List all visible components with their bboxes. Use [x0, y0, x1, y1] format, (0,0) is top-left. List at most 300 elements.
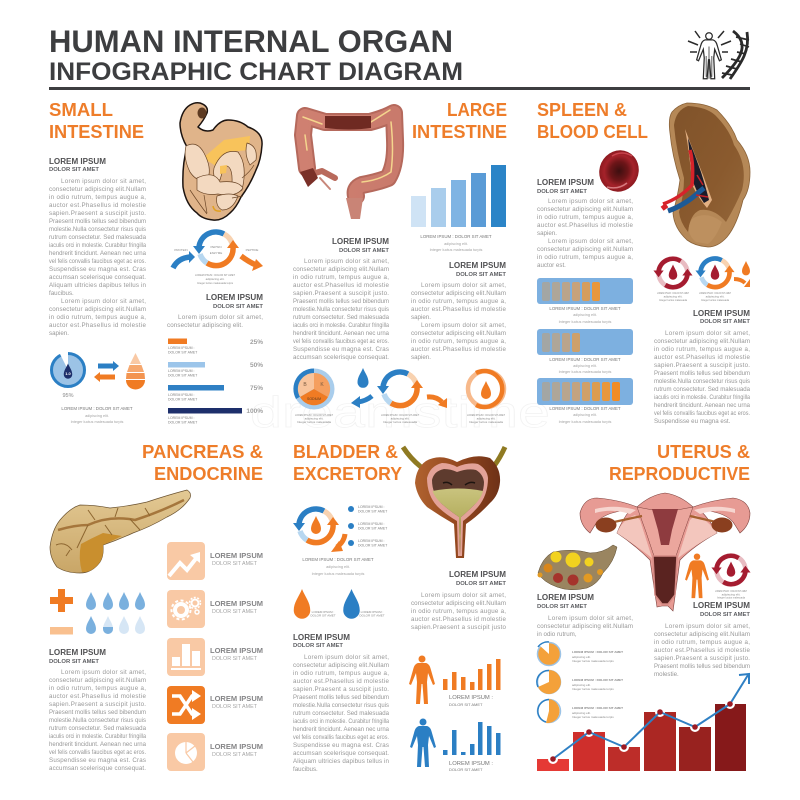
bar chart: percentages: LOREM IPSUM :	[168, 369, 194, 373]
text block: spleen left: Lorem ipsum dolor sit amet,	[548, 238, 633, 245]
title: HUMAN INTERNAL ORGAN	[49, 23, 453, 59]
text block: uterus left: Lorem ipsum dolor sit amet,	[548, 615, 633, 622]
cycle chart: protein enzyme peptide	[173, 232, 263, 285]
bar chart: orange	[443, 659, 500, 707]
small captions: Integer luctus malesuada	[297, 420, 331, 424]
text block: small intestine: LOREM IPSUM	[49, 157, 106, 166]
caption: adipiscing elit.	[85, 414, 109, 418]
small captions: adipiscing elit.	[305, 416, 324, 420]
text block: large intestine right: in odio rutrum, tempus augue a,	[411, 338, 506, 345]
text block: bladder left: Suspendisse eu magna est. Cras	[293, 742, 389, 749]
text block: bladder left: LOREM IPSUM	[293, 633, 350, 642]
icon tile: gears	[167, 590, 263, 628]
text block: spleen left: auctor est.	[537, 262, 566, 269]
legend: bullets: LOREM IPSUM :	[358, 539, 384, 543]
text block: pancreas: rutrum consectetur. Sed malesuada	[49, 725, 147, 732]
text block: large intestine left: Lorem ipsum dolor sit amet,	[304, 258, 389, 265]
text block: bladder left: iaculis orci in molestie. Curabitur fringilla	[293, 718, 389, 725]
text block: small intestine right: consectetur adipiscing elit.	[167, 322, 243, 329]
caption: LOREM IPSUM : DOLOR SIT AMET	[549, 357, 621, 362]
text block: bladder left: DOLOR SIT AMET	[293, 643, 344, 649]
text block: uterus right: DOLOR SIT AMET	[700, 612, 751, 618]
text block: bladder left: molestie.Nulla consectetur risus quis	[293, 702, 389, 709]
caption: LOREM IPSUM : DOLOR SIT AMET	[302, 557, 374, 562]
text block: small intestine: rutrum consectetur. Sed malesuada	[49, 234, 147, 241]
icon tile: pie: DOLOR SIT AMET	[212, 752, 257, 758]
heading: small intestine: SMALL	[49, 99, 113, 120]
icon: blue human	[410, 718, 436, 767]
text block: large intestine right: auctor est.Phasellus id molestie	[411, 346, 507, 353]
text block: spleen left	[537, 178, 634, 269]
heading: spleen: BLOOD CELL	[537, 121, 648, 142]
legend: bullets: DOLOR SIT AMET	[358, 510, 388, 514]
bar chart: percentages: LOREM IPSUM :	[168, 416, 194, 420]
bar chart: percentages: LOREM IPSUM :	[168, 393, 194, 397]
bar chart: percentages: LOREM IPSUM :	[168, 346, 194, 350]
caption	[61, 406, 133, 424]
pie gauge 2	[537, 670, 623, 694]
caption: Integer luctus malesuada turpis	[559, 320, 611, 324]
progress bar 2	[537, 329, 633, 355]
small captions: LOREM IPSUM : DOLOR SIT AMET	[381, 413, 419, 417]
cycle chart: protein enzyme peptide: PEPSIN	[210, 245, 222, 249]
cycle chart: blue and orange	[695, 258, 735, 287]
pie gauge: 95%	[52, 350, 84, 399]
text block: bladder left: Praesent mollis tellus sed bibendum	[293, 694, 389, 701]
icon: red blood cell	[592, 144, 646, 198]
heading: uterus: REPRODUCTIVE	[609, 463, 750, 484]
big drops: LOREM IPSUM :	[312, 610, 335, 614]
text block: small intestine: Lorem ipsum dolor sit amet,	[61, 178, 146, 185]
pie chart: three segments: K	[320, 382, 324, 388]
text block: bladder right	[411, 570, 507, 631]
text block: small intestine: in odio rutrum, tempus augue a,	[49, 194, 146, 201]
text block: pancreas: Suspendisse eu magna est. Cras	[49, 757, 146, 764]
big drops: LOREM IPSUM :	[361, 610, 384, 614]
cycle chart: bladder	[293, 509, 345, 552]
text block: large intestine left: accumsan scelerisque consequat.	[293, 354, 389, 361]
illustration: spleen	[663, 103, 750, 247]
bar chart: percentages	[168, 338, 263, 424]
text block: large intestine right: Lorem ipsum dolor sit amet,	[421, 322, 506, 329]
big drops	[294, 589, 385, 619]
text block: bladder right: auctor est.Phasellus id molestie	[411, 616, 507, 623]
text block: small intestine: faucibus.	[49, 290, 74, 297]
watermark: dreamstime	[250, 388, 550, 437]
ring gauge with drop	[468, 371, 504, 407]
text block: spleen right	[654, 309, 751, 425]
icon tile: shuffle: LOREM IPSUM	[210, 694, 263, 703]
small captions: adipiscing elit.	[477, 416, 496, 420]
cycle chart: protein enzyme peptide: PROTEIN	[174, 248, 188, 252]
text block: large intestine left: LOREM IPSUM	[332, 237, 389, 246]
text block: uterus right: auctor est.Phasellus id molestie	[654, 647, 751, 654]
panel: pancreas and endocrine	[49, 441, 263, 772]
text block: large intestine left: iaculis orci in molestie. Curabitur fringilla	[293, 322, 389, 329]
text block: large intestine left	[293, 237, 390, 361]
pie chart: three segments	[293, 368, 334, 410]
text block: small intestine: in odio rutrum, tempus augue a,	[49, 314, 146, 321]
small caption	[715, 589, 747, 600]
heading: spleen	[537, 99, 648, 142]
text block: pancreas: LOREM IPSUM	[49, 648, 106, 657]
text block: spleen left: LOREM IPSUM	[537, 178, 594, 187]
heading: small intestine	[49, 99, 144, 142]
big drops: DOLOR SIT AMET	[359, 614, 385, 618]
text block: spleen right: DOLOR SIT AMET	[700, 319, 751, 325]
text block: bladder right: sapien.Praesent a suscipit justo	[411, 624, 507, 631]
text block: pancreas: Lorem ipsum dolor sit amet,	[61, 669, 146, 676]
bar chart: percentages: 25%	[250, 339, 263, 346]
text block: bladder left: Lorem ipsum dolor sit amet,	[304, 654, 389, 661]
text block: uterus right: Praesent mollis tellus sed bibendum	[654, 663, 750, 670]
text block: bladder left: in odio rutrum, tempus augue a,	[293, 670, 389, 677]
small caption: Integer luctus malesuada	[717, 596, 745, 600]
text block: large intestine left: auctor est.Phasellus id molestie	[293, 282, 390, 289]
small captions: LOREM IPSUM : DOLOR SIT AMET	[657, 291, 689, 295]
panel: small intestine	[49, 99, 264, 424]
panel: large intestine	[293, 99, 507, 424]
small captions: LOREM IPSUM : DOLOR SIT AMET	[699, 291, 731, 295]
pie gauge 1	[538, 642, 623, 666]
text block: spleen left: auctor est.Phasellus id molestie	[537, 222, 634, 229]
text block: spleen right: rutrum consectetur. Sed malesuada	[654, 386, 751, 393]
text block: pancreas: vel felis convallis faucibus eget ac eros.	[49, 749, 146, 756]
icon tile: shuffle: DOLOR SIT AMET	[212, 704, 257, 710]
caption: LOREM IPSUM : DOLOR SIT AMET	[420, 234, 492, 239]
text block: spleen left: in odio rutrum, tempus augue a,	[537, 254, 633, 261]
heading: uterus: UTERUS &	[657, 441, 750, 462]
text block: small intestine: Suspendisse eu magna est. Cras	[49, 266, 146, 273]
text block: spleen left: in odio rutrum, tempus augue a,	[537, 214, 633, 221]
text block: pancreas: accumsan scelerisque consequat.	[49, 765, 146, 772]
text block: spleen right: sapien.Praesent a suscipit justo.	[654, 362, 750, 369]
cycle chart: red	[711, 556, 751, 584]
text block: spleen right: LOREM IPSUM	[693, 309, 750, 318]
text block: pancreas: DOLOR SIT AMET	[49, 659, 100, 665]
text block: large intestine right: consectetur adipiscing elit.Nullam	[411, 330, 506, 337]
pie gauge 3: adipiscing elit.	[572, 711, 591, 715]
small captions: Integer luctus malesuada	[469, 420, 503, 424]
caption: adipiscing elit.	[573, 413, 597, 417]
text block: bladder left: sapien.Praesent a suscipit justo.	[293, 686, 389, 693]
heading: pancreas: PANCREAS &	[142, 441, 263, 462]
icon: human body and DNA	[688, 31, 749, 79]
text block: bladder left: faucibus.	[293, 766, 318, 773]
cycle chart: protein enzyme peptide: LOREM IPSUM : DOLOR SIT AMET	[195, 273, 235, 277]
icon tile: shuffle	[167, 686, 263, 724]
small captions: LOREM IPSUM : DOLOR SIT AMET	[467, 413, 505, 417]
text block: pancreas: molestie.Nulla consectetur risus quis	[49, 717, 146, 724]
icon: orange human	[685, 553, 709, 598]
icon tile: gears: DOLOR SIT AMET	[212, 609, 257, 615]
caption: Integer luctus malesuada turpis	[430, 248, 482, 252]
icon: plus	[50, 589, 73, 612]
text block: spleen left: sapien.	[537, 230, 557, 237]
text block: small intestine: sapien.	[49, 330, 69, 337]
caption	[549, 406, 621, 424]
bar chart: percentages: DOLOR SIT AMET	[168, 398, 198, 402]
illustration: bladder	[403, 447, 505, 558]
small caption: LOREM IPSUM : DOLOR SIT AMET	[715, 589, 747, 593]
text block: uterus right: molestie.	[654, 671, 679, 678]
caption	[549, 306, 621, 324]
bar chart: orange: LOREM IPSUM :	[449, 695, 493, 701]
pie gauge 1: LOREM IPSUM : DOLOR SIT AMET	[572, 650, 623, 654]
icon: orange drop and arrow	[734, 261, 750, 287]
text block: small intestine: consectetur adipiscing elit.Nullam	[49, 186, 146, 193]
panel: bladder and excretory	[293, 441, 507, 773]
big drops: DOLOR SIT AMET	[310, 614, 336, 618]
small captions: Integer luctus malesuada	[659, 298, 687, 302]
icon tile: growth arrow	[167, 542, 263, 580]
icon tile: pie	[167, 733, 263, 771]
pie gauge 2: LOREM IPSUM : DOLOR SIT AMET	[572, 678, 623, 682]
text block: bladder left: consectetur adipiscing elit.Nullam	[293, 662, 389, 669]
text block: large intestine left: vel felis convallis faucibus eget ac eros.	[293, 338, 389, 345]
legend: bullets	[348, 505, 388, 548]
text block: large intestine left: molestie.Nulla consectetur risus quis	[293, 306, 389, 313]
small captions	[295, 413, 505, 424]
text block: uterus left: consectetur adipiscing elit.Nullam	[537, 623, 633, 630]
heading: spleen: SPLEEN &	[537, 99, 627, 120]
text block: small intestine: auctor est.Phasellus id molestie	[49, 202, 147, 209]
illustration: small intestine	[180, 103, 262, 220]
text block: bladder right: DOLOR SIT AMET	[456, 581, 507, 587]
icon tile: bars: LOREM IPSUM	[210, 646, 263, 655]
icon tile: pie: LOREM IPSUM	[210, 742, 263, 751]
illustration: uterus	[580, 493, 750, 611]
text block: uterus right: Lorem ipsum dolor sit amet,	[665, 623, 750, 630]
bar chart: rising blue bars	[411, 165, 506, 227]
text block: large intestine left: Praesent mollis tellus sed bibendum	[293, 298, 389, 305]
text block: uterus left	[537, 593, 633, 638]
caption: Integer luctus malesuada turpis	[312, 572, 364, 576]
text block: bladder left: Aliquam ultricies dapibus tellus in	[293, 758, 390, 765]
text block: spleen left: Lorem ipsum dolor sit amet,	[548, 198, 633, 205]
small captions: adipiscing elit.	[706, 294, 725, 298]
text block: small intestine: sapien.Praesent a suscipit justo.	[49, 210, 146, 217]
small captions: adipiscing elit.	[664, 294, 683, 298]
caption: Integer luctus malesuada turpis	[559, 420, 611, 424]
text block: large intestine right: DOLOR SIT AMET	[456, 272, 507, 278]
caption	[302, 557, 374, 576]
text block: large intestine left: consectetur adipiscing elit.Nullam	[293, 266, 389, 273]
text block: small intestine: iaculis orci in molestie. Curabitur fringilla	[49, 242, 146, 249]
heading: large intestine: LARGE	[447, 99, 507, 120]
cycle chart: protein enzyme peptide: adipiscing elit.	[206, 277, 225, 281]
text block: uterus right: LOREM IPSUM	[693, 601, 750, 610]
text block: pancreas: in odio rutrum, tempus augue a,	[49, 685, 146, 692]
title: INFOGRAPHIC CHART DIAGRAM	[49, 58, 463, 86]
text block: small intestine right: LOREM IPSUM	[206, 293, 263, 302]
icon tile: bars: DOLOR SIT AMET	[212, 656, 257, 662]
bar chart: percentages: 50%	[250, 362, 263, 369]
text block: small intestine right: DOLOR SIT AMET	[213, 304, 264, 310]
text block: bladder right: in odio rutrum, tempus augue a,	[411, 608, 506, 615]
text block: large intestine right: sapien.	[411, 314, 431, 321]
text block: spleen right: in odio rutrum, tempus augue a,	[654, 346, 750, 353]
text block: spleen right: iaculis orci in molestie. Curabitur fringilla	[654, 394, 750, 401]
text block: spleen right: Suspendisse eu magna est.	[654, 418, 731, 425]
pie gauge 2: Integer luctus malesuada turpis	[572, 687, 614, 691]
text block: uterus left: in odio rutrum,	[537, 631, 577, 638]
text block: uterus right	[654, 601, 751, 678]
panel: spleen and blood cell	[537, 99, 751, 425]
icon: segmented drop	[126, 353, 145, 390]
heading: bladder: EXCRETORY	[293, 463, 403, 484]
text block: large intestine right	[411, 261, 507, 361]
arrow: orange	[427, 397, 447, 408]
text block: spleen left: consectetur adipiscing elit.Nullam	[537, 206, 633, 213]
small captions: adipiscing elit.	[391, 416, 410, 420]
text block: bladder left: vel felis convallis faucibus eget ac eros.	[293, 734, 389, 741]
pie chart: three segments: B	[303, 382, 307, 388]
text block: large intestine right: Lorem ipsum dolor sit amet,	[421, 282, 506, 289]
illustration: large intestine	[300, 110, 395, 219]
icon: blue drop with arrow	[351, 368, 372, 408]
text block: pancreas: sapien.Praesent a suscipit justo.	[49, 701, 146, 708]
text block: small intestine: Praesent mollis tellus sed bibendum	[49, 218, 146, 225]
caption: LOREM IPSUM : DOLOR SIT AMET	[549, 306, 621, 311]
text block: small intestine: hendrerit tincidunt. Aenean nec urna	[49, 250, 147, 257]
bar chart: orange: DOLOR SIT AMET	[449, 702, 483, 707]
text block: uterus right: in odio rutrum, tempus augue a,	[654, 639, 750, 646]
text block: bladder left: rutrum consectetur. Sed malesuada	[293, 710, 390, 717]
drops grid	[86, 592, 145, 634]
pie gauge 3	[538, 699, 623, 723]
pie gauge 3: LOREM IPSUM : DOLOR SIT AMET	[572, 706, 623, 710]
caption: LOREM IPSUM : DOLOR SIT AMET	[61, 406, 133, 411]
small captions: LOREM IPSUM : DOLOR SIT AMET	[295, 413, 333, 417]
text block: bladder left	[293, 633, 390, 773]
bar chart: blue: LOREM IPSUM :	[449, 761, 493, 767]
heading: large intestine	[412, 99, 507, 142]
caption: LOREM IPSUM : DOLOR SIT AMET	[549, 406, 621, 411]
text block: small intestine right	[167, 293, 264, 329]
text block: pancreas: hendrerit tincidunt. Aenean nec urna	[49, 741, 147, 748]
icon: minus	[50, 627, 73, 634]
text block: small intestine: accumsan scelerisque consequat.	[49, 274, 146, 281]
bar chart: percentages: DOLOR SIT AMET	[168, 420, 198, 424]
text block: small intestine	[49, 157, 147, 337]
text block: bladder left: accumsan scelerisque consequat.	[293, 750, 389, 757]
small captions: Integer luctus malesuada	[701, 298, 729, 302]
text block: large intestine right: LOREM IPSUM	[449, 261, 506, 270]
text block: spleen right: hendrerit tincidunt. Aenean nec urna	[654, 402, 751, 409]
legend: bullets: DOLOR SIT AMET	[358, 526, 388, 530]
heading: bladder: BLADDER &	[293, 441, 398, 462]
progress bar 3	[537, 378, 633, 405]
cycle chart: protein enzyme peptide: PEPTIDE	[246, 248, 258, 252]
text block: pancreas: consectetur adipiscing elit.Nullam	[49, 677, 146, 684]
heading: pancreas: ENDOCRINE	[154, 463, 263, 484]
bar and line chart	[537, 674, 749, 771]
title	[49, 23, 750, 90]
progress bar 1	[537, 278, 633, 304]
text block: small intestine: molestie.Nulla consectetur risus quis	[49, 226, 146, 233]
bar chart: blue: DOLOR SIT AMET	[449, 767, 483, 772]
panel: uterus and reproductive	[537, 441, 751, 771]
heading: pancreas	[142, 441, 263, 484]
text block: uterus right: sapien.Praesent a suscipit justo.	[654, 655, 750, 662]
pie chart: three segments: SODIUM	[307, 397, 321, 401]
heading: uterus	[609, 441, 750, 484]
text block: small intestine right: Lorem ipsum dolor sit amet,	[178, 314, 263, 321]
heading: large intestine: INTESTINE	[412, 121, 507, 142]
illustration: ovary	[538, 545, 617, 590]
text block: small intestine: vel felis convallis faucibus eget ac eros.	[49, 258, 146, 265]
text block: uterus left: DOLOR SIT AMET	[537, 604, 588, 610]
bar chart: percentages: DOLOR SIT AMET	[168, 350, 198, 354]
caption	[549, 357, 621, 374]
text block: spleen right: consectetur adipiscing elit.Nullam	[654, 338, 750, 345]
pie gauge 2: adipiscing elit.	[572, 683, 591, 687]
text block: uterus left: LOREM IPSUM	[537, 593, 594, 602]
small captions: Integer luctus malesuada	[383, 420, 417, 424]
icon tile: bars	[167, 638, 263, 676]
cycle chart	[377, 372, 423, 406]
cycle chart: protein enzyme peptide: ENZYME	[210, 251, 222, 255]
text block: spleen left: DOLOR SIT AMET	[537, 189, 588, 195]
text block: large intestine left: DOLOR SIT AMET	[339, 248, 390, 254]
illustration: pancreas	[50, 490, 191, 573]
text block: spleen right: vel felis convallis faucibus eget ac eros.	[654, 410, 750, 417]
legend: bullets: LOREM IPSUM :	[358, 505, 384, 509]
legend: bullets: LOREM IPSUM :	[358, 522, 384, 526]
text block: uterus right: consectetur adipiscing elit.Nullam	[654, 631, 750, 638]
text block: small intestine: Lorem ipsum dolor sit amet,	[61, 298, 146, 305]
text block: pancreas: Praesent mollis tellus sed bibendum	[49, 709, 146, 716]
pie gauge 3: Integer luctus malesuada turpis	[572, 715, 614, 719]
text block: pancreas: auctor est.Phasellus id molestie	[49, 693, 147, 700]
caption: Integer luctus malesuada turpis	[71, 420, 123, 424]
text block: spleen right: Lorem ipsum dolor sit amet,	[665, 330, 750, 337]
text block: bladder right: LOREM IPSUM	[449, 570, 506, 579]
caption: adipiscing elit.	[573, 313, 597, 317]
icon tile: growth arrow: LOREM IPSUM	[210, 551, 263, 560]
text block: pancreas: iaculis orci in molestie. Curabitur fringilla	[49, 733, 146, 740]
text block: bladder right: consectetur adipiscing elit.Nullam	[411, 600, 506, 607]
caption: adipiscing elit.	[444, 242, 468, 246]
caption	[420, 234, 492, 252]
text block: large intestine left: rutrum consectetur. Sed malesuada	[293, 314, 390, 321]
text block: large intestine left: hendrerit tincidunt. Aenean nec urna	[293, 330, 390, 337]
icon tile: gears: LOREM IPSUM	[210, 599, 263, 608]
text block: small intestine: consectetur adipiscing elit.Nullam	[49, 306, 146, 313]
icon tile: growth arrow: DOLOR SIT AMET	[212, 561, 257, 567]
text block: spleen left: consectetur adipiscing elit.Nullam	[537, 246, 633, 253]
pie gauge: 95%: 1.0	[65, 371, 72, 376]
text block: spleen right: auctor est.Phasellus id molestie	[654, 354, 751, 361]
heading: small intestine: INTESTINE	[49, 121, 144, 142]
cycle chart: red	[653, 259, 693, 287]
text block: large intestine left: in odio rutrum, tempus augue a,	[293, 274, 389, 281]
heading: bladder	[293, 441, 403, 484]
text block: small intestine: DOLOR SIT AMET	[49, 167, 100, 173]
text block: bladder left: auctor est.Phasellus id molestie	[293, 678, 390, 685]
text block: large intestine right: sapien.	[411, 354, 431, 361]
text block: spleen right: Praesent mollis tellus sed bibendum	[654, 370, 750, 377]
text block: bladder right: Lorem ipsum dolor sit amet,	[421, 592, 506, 599]
cycle chart: protein enzyme peptide: Integer luctus malesuada turpis	[197, 281, 233, 285]
text block: large intestine left: sapien.Praesent a suscipit justo.	[293, 290, 389, 297]
text block: small intestine: Aliquam ultricies dapibus tellus in	[49, 282, 147, 289]
caption: Integer luctus malesuada turpis	[559, 370, 611, 374]
bar chart: percentages: DOLOR SIT AMET	[168, 374, 198, 378]
text block: small intestine: auctor est.Phasellus id molestie	[49, 322, 147, 329]
pie gauge 1: adipiscing elit.	[572, 655, 591, 659]
